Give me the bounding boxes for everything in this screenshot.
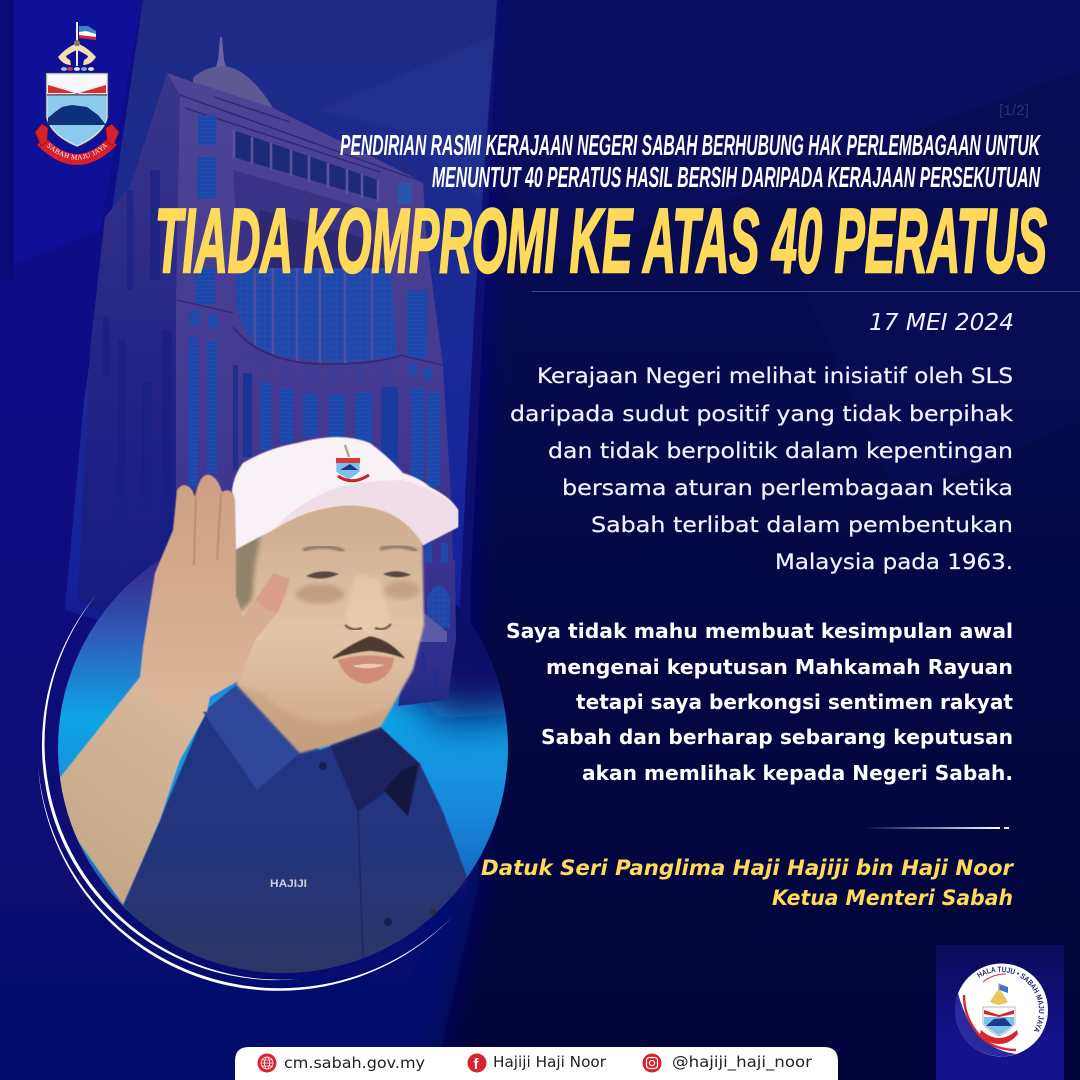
logo: Hala Tuju Sabah Maju Jaya badge — [954, 964, 1048, 1056]
arm — [50, 677, 207, 905]
building: left wing — [78, 73, 233, 640]
collar right — [330, 727, 420, 816]
building: spire and dome — [193, 37, 273, 108]
shirt and arm — [50, 677, 470, 985]
body text: chief minister quote: tetapi saya berkongsi sentimen rakyat — [576, 690, 1013, 714]
building: upper tower windows — [177, 268, 442, 365]
logo: Sabah state crest — [34, 22, 120, 165]
body text: government statement: daripada sudut positif yang tidak berpihak — [510, 402, 1014, 427]
logo: Hala Tuju Sabah Maju Jaya badge: HALA TUJU • SABAH MAJU JAYA — [976, 966, 1044, 1032]
facial features — [237, 546, 420, 753]
body text: chief minister quote: Saya tidak mahu membuat kesimpulan awal — [506, 619, 1013, 643]
body text: government statement: Malaysia pada 1963. — [775, 550, 1013, 575]
building: dark left tower stripes — [103, 170, 172, 580]
date: 17 MEI 2024 — [869, 310, 1014, 336]
building: top floor windows — [197, 115, 412, 275]
building: curved glass wall — [233, 268, 400, 364]
crest beads — [61, 67, 94, 71]
badge crest — [980, 983, 1018, 1044]
icon: facebook — [468, 1054, 486, 1073]
body text: chief minister quote: mengenai keputusan Mahkamah Rayuan — [546, 655, 1013, 679]
instagram label: @hajiji_haji_noor — [672, 1053, 813, 1072]
body text: government statement: bersama aturan perlembagaan ketika — [562, 476, 1013, 501]
shirt — [123, 685, 470, 985]
cap logo — [336, 445, 369, 481]
crest flag — [76, 22, 96, 66]
raised hand — [140, 475, 290, 712]
signature divider — [864, 827, 1009, 829]
building: roof bars — [180, 95, 423, 182]
portrait: dark upper right fade — [392, 604, 508, 750]
building: curve small windows — [246, 350, 432, 383]
thumb tint — [256, 574, 289, 612]
body text: government statement: Kerajaan Negeri melihat inisiatif oleh SLS — [537, 364, 1013, 389]
building illustration — [78, 37, 453, 680]
crest knot — [74, 40, 80, 46]
crest shield — [46, 73, 108, 147]
crest hands — [58, 44, 96, 65]
signature — [481, 856, 1014, 911]
name tag: HAJIJI — [270, 878, 307, 890]
facebook label: Hajiji Haji Noor — [493, 1053, 607, 1071]
body text: chief minister quote: Sabah dan berharap sebarang keputusan — [541, 725, 1013, 749]
cap brim shading — [273, 480, 458, 545]
cap — [232, 437, 458, 550]
body text: government statement: dan tidak berpolitik dalam kepentingan — [548, 439, 1013, 464]
portrait circle — [58, 523, 508, 973]
portrait rings — [38, 594, 452, 991]
bottom right badge panel — [936, 945, 1064, 1080]
building: tall windows — [188, 337, 440, 487]
neck and face — [236, 490, 424, 753]
icon: website globe — [258, 1054, 276, 1072]
collar left — [203, 685, 320, 790]
crest motto: SABAH MAJU JAYA — [47, 144, 108, 160]
body text: chief minister quote — [506, 619, 1013, 785]
signature: Datuk Seri Panglima Haji Hajiji bin Haji Noor — [481, 856, 1014, 881]
footer social bar — [235, 1047, 838, 1080]
building: lower annex — [398, 543, 456, 706]
website label: cm.sabah.gov.my — [284, 1054, 425, 1072]
body text: government statement: Sabah terlibat dalam pembentukan — [591, 513, 1013, 538]
signature: Ketua Menteri Sabah — [772, 886, 1013, 911]
icon: facebook: f — [474, 1056, 480, 1073]
crest ribbon — [35, 124, 119, 160]
person portrait — [50, 437, 470, 985]
icon: instagram — [642, 1054, 662, 1072]
hair sideburn — [234, 528, 262, 612]
finger lines — [194, 494, 221, 565]
body text: chief minister quote: akan memIihak kepada Negeri Sabah. — [582, 761, 1013, 785]
body text: government statement — [510, 364, 1014, 575]
shirt placket and buttons — [319, 762, 436, 958]
heading: subtitle — [340, 130, 1041, 194]
divider — [532, 291, 1080, 292]
building: main faces — [167, 73, 453, 680]
page counter: [1/2] — [999, 102, 1029, 119]
